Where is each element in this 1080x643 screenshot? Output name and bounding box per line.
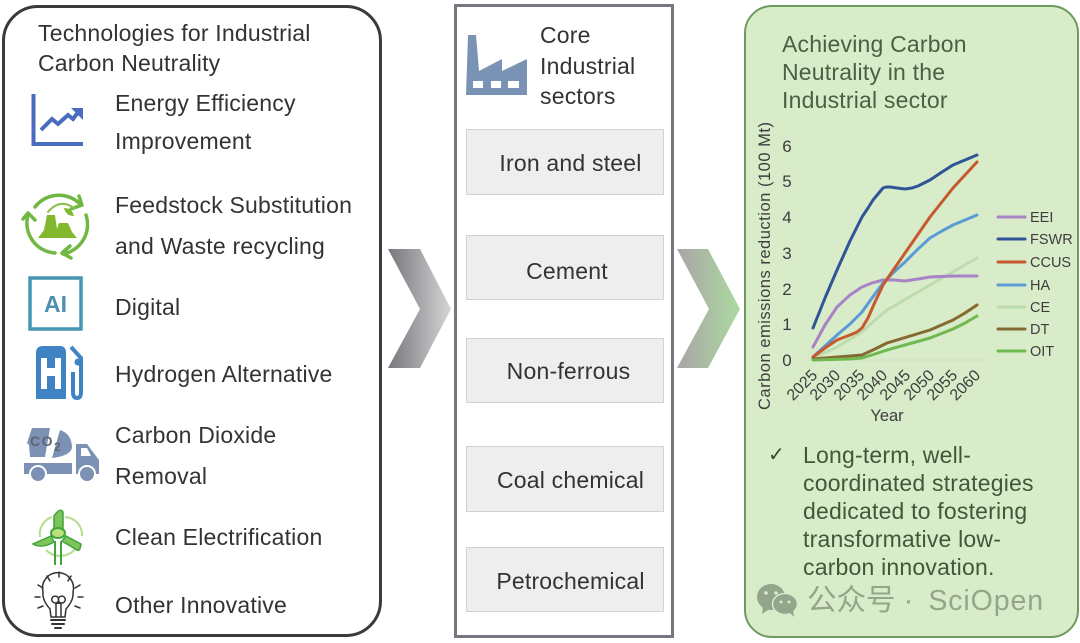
icon: wind turbine	[33, 510, 82, 565]
legend: HA	[1030, 278, 1050, 294]
x axis labels: 2050	[901, 367, 938, 404]
y axis labels: 3	[782, 244, 792, 263]
check mark: ✓	[768, 442, 785, 466]
text: digital: Digital	[115, 294, 180, 320]
icon: feedstock recycling	[23, 195, 88, 258]
legend: EEI	[1030, 210, 1053, 226]
text: hydrogen: Hydrogen Alternative	[115, 361, 333, 387]
sector: coal chemical: Coal chemical	[497, 467, 644, 493]
x axis labels: 2045	[877, 367, 914, 404]
watermark: text: 公众号 · SciOpen	[807, 584, 1044, 617]
legend: CCUS	[1030, 255, 1071, 271]
legend: DT	[1030, 322, 1049, 338]
sector: iron and steel: Iron and steel	[499, 150, 642, 176]
legend: OIT	[1030, 344, 1054, 360]
text: clean electrification: Clean Electrification	[115, 524, 322, 550]
text: strategies	[803, 442, 1034, 580]
heading: achieving carbon neutrality: Neutrality in the	[782, 59, 945, 85]
icon: AI box	[30, 278, 81, 329]
x axis labels: 2060	[947, 367, 984, 404]
y axis labels: 6	[782, 137, 792, 156]
arrow: left chevron	[388, 249, 451, 368]
x axis labels: 2040	[854, 367, 891, 404]
legend: FSWR	[1030, 232, 1073, 248]
x axis labels: 2030	[807, 367, 844, 404]
sector: cement: Cement	[526, 258, 608, 284]
text: carbon dioxide removal	[115, 422, 276, 489]
text: other innovative: Other Innovative	[115, 592, 287, 618]
sector: cement	[466, 235, 664, 300]
heading: core sectors	[540, 22, 635, 109]
heading: achieving carbon neutrality: Industrial sector	[782, 87, 948, 113]
heading: core sectors: sectors	[540, 83, 616, 109]
icon: factory	[466, 35, 527, 95]
series lines	[813, 155, 977, 360]
line chart	[756, 122, 986, 425]
text: strategies: Long-term, well-	[803, 442, 971, 468]
x axis labels: 2035	[831, 367, 868, 404]
text: feedstock: Feedstock Substitution	[115, 192, 352, 218]
legend	[998, 210, 1073, 360]
sector: non-ferrous	[466, 338, 664, 403]
x axis labels: 2025	[784, 367, 821, 404]
icon: hydrogen pump	[36, 346, 82, 399]
text: energy efficiency: Energy Efficiency	[115, 90, 296, 116]
heading: achieving carbon neutrality	[782, 31, 967, 113]
y axis labels: 0	[782, 351, 792, 370]
panel: core sectors	[454, 4, 674, 638]
icon: CO2 truck	[24, 428, 99, 482]
icon: CO2 truck: CO	[30, 433, 54, 449]
icon: CO2 truck: 2	[54, 440, 61, 454]
text: strategies: transformative low-	[803, 526, 1001, 552]
sector: coal chemical	[466, 446, 664, 512]
panel: carbon neutrality	[744, 5, 1079, 638]
sector: non-ferrous: Non-ferrous	[507, 358, 630, 384]
y axis labels: 2	[782, 280, 792, 299]
text: energy efficiency: Improvement	[115, 128, 251, 154]
y axis labels: 1	[782, 315, 792, 334]
sector: petrochemical	[466, 547, 664, 612]
icon: light bulb	[35, 572, 83, 628]
heading: core sectors: Core	[540, 22, 591, 48]
sector: iron and steel	[466, 129, 664, 195]
icon: AI box: AI	[44, 291, 67, 317]
arrow: right chevron	[677, 249, 740, 368]
text: strategies: dedicated to fostering	[803, 498, 1027, 524]
heading: technologies	[38, 20, 311, 76]
heading: technologies: Carbon Neutrality	[38, 50, 220, 76]
text: strategies: carbon innovation.	[803, 554, 995, 580]
watermark: wechat icon	[757, 584, 798, 617]
y axis labels	[782, 137, 792, 370]
icon: efficiency chart	[34, 94, 83, 144]
x axis title: Year	[870, 407, 904, 425]
text: carbon dioxide removal: Removal	[115, 463, 207, 489]
text: strategies: coordinated strategies	[803, 470, 1034, 496]
heading: core sectors: Industrial	[540, 52, 635, 78]
y axis labels: 5	[782, 172, 792, 191]
heading: achieving carbon neutrality: Achieving Carbon	[782, 31, 967, 57]
y axis labels: 4	[782, 208, 792, 227]
x axis labels: 2055	[924, 367, 961, 404]
y axis title: Carbon emissions reduction (100 Mt)	[756, 122, 774, 410]
text: feedstock	[115, 192, 352, 259]
x axis labels	[784, 367, 984, 404]
sector: petrochemical: Petrochemical	[496, 568, 645, 594]
panel: technologies	[2, 5, 382, 637]
text: feedstock: and Waste recycling	[115, 233, 325, 259]
legend: CE	[1030, 300, 1050, 316]
text: carbon dioxide removal: Carbon Dioxide	[115, 422, 276, 448]
text: energy efficiency	[115, 90, 296, 154]
heading: technologies: Technologies for Industrial	[38, 20, 311, 46]
